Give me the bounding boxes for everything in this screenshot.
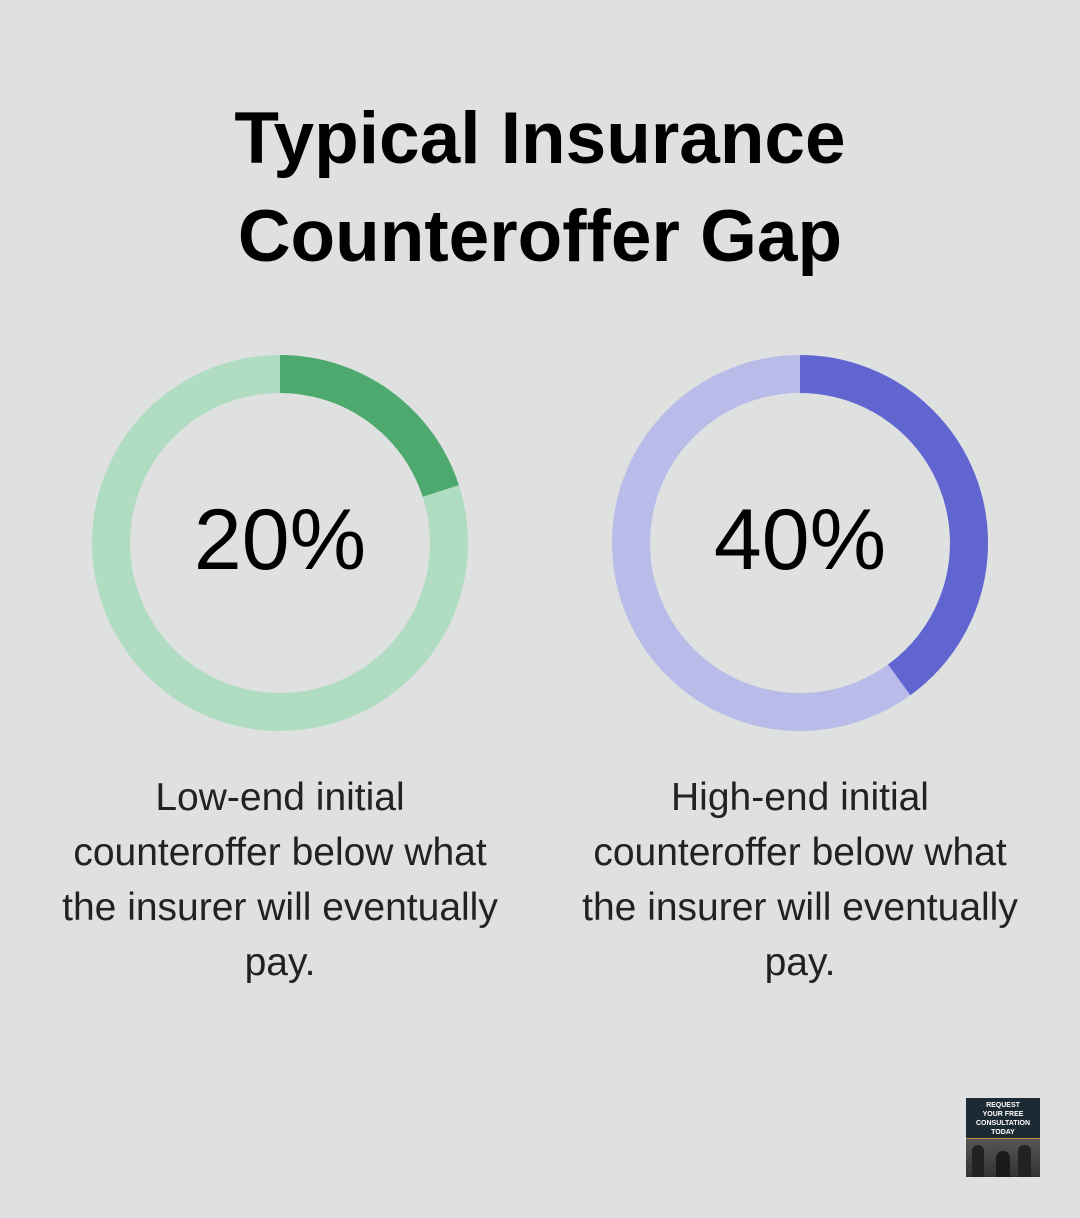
caption: high-end [582,776,1018,984]
caption: high-end: High-end initial [671,776,929,819]
caption: low-end: the insurer will eventually [62,886,498,929]
badge: request consultation: YOUR FREE [983,1111,1023,1118]
badge: request consultation: CONSULTATION [976,1120,1030,1127]
caption: low-end: pay. [245,941,315,984]
caption: low-end [62,776,498,984]
caption: low-end: counteroffer below what [73,831,487,874]
stat: 40%: 40% [714,492,886,588]
badge: request consultation: TODAY [991,1129,1015,1136]
caption: high-end: pay. [765,941,835,984]
badge: request consultation [966,1098,1040,1177]
title: Counteroffer Gap [238,196,842,277]
donut chart: 40% [612,355,988,731]
badge: request consultation: REQUEST [986,1102,1020,1109]
title: Typical Insurance [234,98,846,179]
caption: high-end: counteroffer below what [593,831,1007,874]
donut chart: 20% [92,355,468,731]
title [234,98,846,277]
caption: low-end: Low-end initial [155,776,405,819]
caption: high-end: the insurer will eventually [582,886,1018,929]
stat: 20%: 20% [194,492,366,588]
